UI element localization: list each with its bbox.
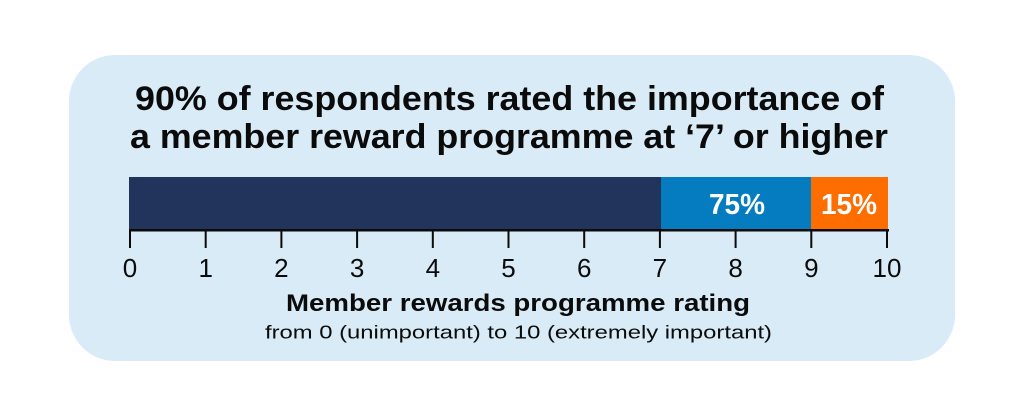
axis subtitle: from 0 (unimportant) to 10 (extremely important) [265, 322, 772, 342]
stacked bar chart [129, 177, 888, 229]
axis labels: 8 [728, 253, 743, 283]
axis labels: 7 [653, 253, 667, 283]
axis labels: 10 [873, 253, 901, 283]
segment: 75% [661, 177, 811, 229]
title [130, 80, 888, 156]
axis labels: 9 [804, 253, 819, 283]
axis labels: 0 [123, 253, 137, 283]
title: 90% of respondents rated the importance of [135, 80, 885, 118]
axis labels: 5 [501, 253, 516, 283]
segment: 75%: 75% [709, 189, 765, 221]
axis labels [123, 253, 901, 283]
segment: 0 to 7 [129, 177, 661, 229]
segment: 15%: 15% [821, 189, 877, 221]
axis title: Member rewards programme rating [286, 290, 750, 317]
panel: background [69, 55, 955, 361]
title: a member reward programme at ‘7’ or higher [130, 118, 888, 156]
axis [129, 229, 889, 248]
axis labels: 6 [577, 253, 591, 283]
axis labels: 4 [426, 253, 440, 283]
axis labels: 3 [350, 253, 364, 283]
axis labels: 1 [198, 253, 213, 283]
axis labels: 2 [274, 253, 289, 283]
segment: 15% [811, 177, 888, 229]
